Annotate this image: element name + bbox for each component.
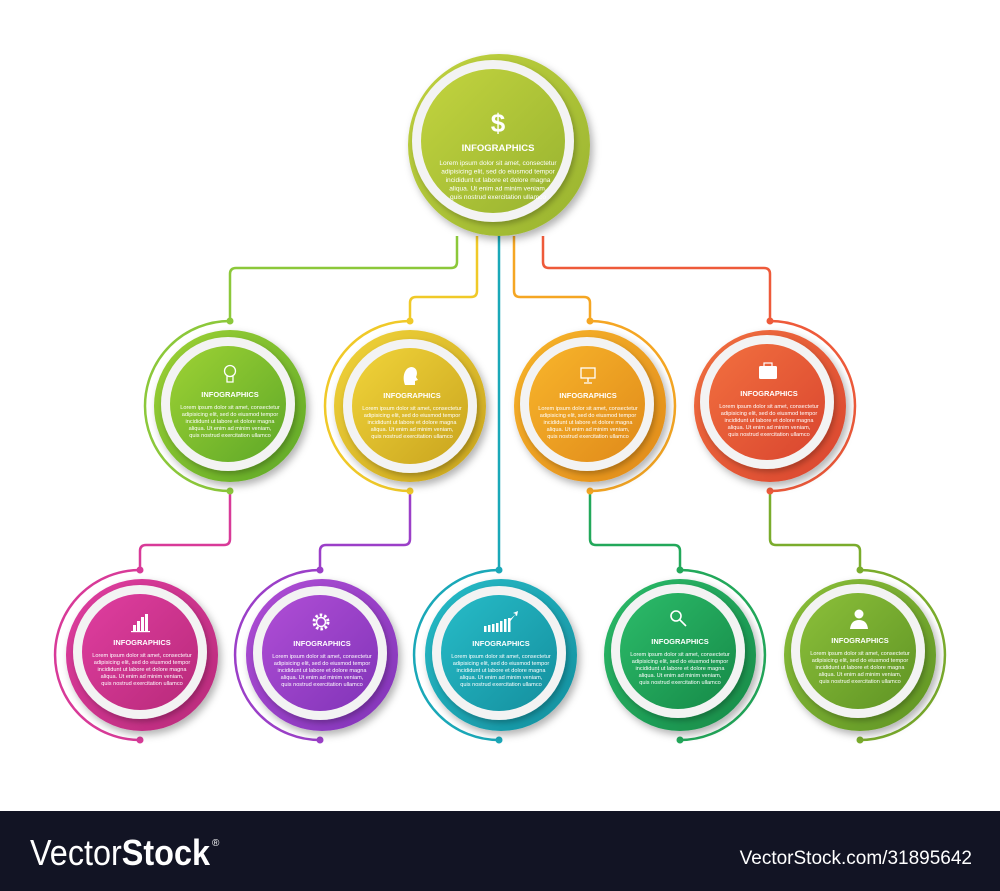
node: middle yellow: Lorem ipsum dolor sit amet, consectetur <box>362 406 462 412</box>
node: middle orange <box>514 318 675 494</box>
node: bottom teal: INFOGRAPHICS <box>472 639 530 648</box>
node: bottom pink: incididunt ut labore et dolore magna <box>98 667 187 673</box>
node: top <box>408 54 590 236</box>
node: bottom green: aliqua. Ut enim ad minim veniam, <box>639 673 722 679</box>
node: bottom olive: quis nostrud exercitation ullamco <box>819 679 901 685</box>
node: bottom green: quis nostrud exercitation ullamco <box>639 680 721 686</box>
node: bottom pink <box>55 566 218 744</box>
node: bottom purple <box>235 566 398 744</box>
node: middle yellow: aliqua. Ut enim ad minim veniam, <box>371 427 454 433</box>
node: middle red: incididunt ut labore et dolore magna <box>725 418 814 424</box>
node: middle green: incididunt ut labore et dolore magna <box>186 419 275 425</box>
node: middle orange: adipisicing elit, sed do eiusmod tempor <box>540 413 636 419</box>
node: middle red: INFOGRAPHICS <box>740 389 798 398</box>
node: bottom pink: INFOGRAPHICS <box>113 638 171 647</box>
node: middle red: aliqua. Ut enim ad minim veniam, <box>728 425 811 431</box>
node: middle orange: quis nostrud exercitation ullamco <box>547 434 629 440</box>
footer banner: ® <box>212 838 220 849</box>
icon: briefcase <box>759 363 777 379</box>
connectors: middle to bottom row <box>140 491 860 570</box>
node: middle red: adipisicing elit, sed do eiusmod tempor <box>721 411 817 417</box>
icon: gear <box>314 615 328 629</box>
node: middle green <box>145 318 306 494</box>
node: middle yellow: quis nostrud exercitation ullamco <box>371 434 453 440</box>
body text: adipisicing elit, sed do eiusmod tempor <box>441 168 556 176</box>
node: bottom purple: Lorem ipsum dolor sit amet, consectetur <box>272 654 372 660</box>
node: bottom olive: Lorem ipsum dolor sit amet, consectetur <box>810 651 910 657</box>
node: bottom olive: incididunt ut labore et dolore magna <box>816 665 905 671</box>
footer banner <box>0 811 1000 891</box>
node: bottom teal <box>414 566 577 744</box>
node: middle green: aliqua. Ut enim ad minim veniam, <box>189 426 272 432</box>
node: middle orange: aliqua. Ut enim ad minim veniam, <box>547 427 630 433</box>
node: bottom pink: quis nostrud exercitation ullamco <box>101 681 183 687</box>
body text: incididunt ut labore et dolore magna <box>446 177 551 184</box>
node: middle green: INFOGRAPHICS <box>201 390 259 399</box>
node: middle red: Lorem ipsum dolor sit amet, consectetur <box>719 404 819 410</box>
logo: VectorStock <box>30 832 211 873</box>
icon: dollar: $ <box>491 108 506 138</box>
node: bottom teal: quis nostrud exercitation ullamco <box>460 682 542 688</box>
node: bottom teal: adipisicing elit, sed do eiusmod tempor <box>453 661 549 667</box>
node: bottom green: Lorem ipsum dolor sit amet, consectetur <box>630 652 730 658</box>
node: bottom green: adipisicing elit, sed do eiusmod tempor <box>632 659 728 665</box>
node: bottom green: incididunt ut labore et dolore magna <box>636 666 725 672</box>
title: INFOGRAPHICS <box>462 143 534 154</box>
node: bottom purple: adipisicing elit, sed do eiusmod tempor <box>274 661 370 667</box>
node: middle orange: INFOGRAPHICS <box>559 391 617 400</box>
icon: bulb <box>224 366 236 382</box>
node: bottom olive: aliqua. Ut enim ad minim veniam, <box>819 672 902 678</box>
node: bottom purple: aliqua. Ut enim ad minim veniam, <box>281 675 364 681</box>
connectors: top to middle row <box>230 236 770 570</box>
node: bottom teal: aliqua. Ut enim ad minim veniam, <box>460 675 543 681</box>
node: middle green: adipisicing elit, sed do eiusmod tempor <box>182 412 278 418</box>
icon: magnifier <box>671 611 686 626</box>
body text: Lorem ipsum dolor sit amet, consectetur <box>439 160 557 167</box>
icon: growth chart <box>484 611 518 632</box>
icon: bar chart <box>131 614 150 632</box>
node: bottom teal: Lorem ipsum dolor sit amet, consectetur <box>451 654 551 660</box>
node: middle green: quis nostrud exercitation ullamco <box>189 433 271 439</box>
body text: aliqua. Ut enim ad minim veniam, <box>449 186 547 192</box>
node: middle yellow: adipisicing elit, sed do eiusmod tempor <box>364 413 460 419</box>
node: bottom green <box>604 566 765 744</box>
body text: quis nostrud exercitation ullamco <box>450 194 546 201</box>
node: bottom olive <box>784 566 945 744</box>
icon: monitor <box>581 368 595 383</box>
node: bottom pink: Lorem ipsum dolor sit amet, consectetur <box>92 653 192 659</box>
node: middle yellow: INFOGRAPHICS <box>383 391 441 400</box>
node: bottom teal: incididunt ut labore et dolore magna <box>457 668 546 674</box>
body text <box>439 160 557 201</box>
icon: head <box>404 367 418 385</box>
node: bottom olive: INFOGRAPHICS <box>831 636 889 645</box>
node: bottom purple: incididunt ut labore et dolore magna <box>278 668 367 674</box>
url: VectorStock.com/31895642 <box>740 848 972 869</box>
icon: person <box>850 610 868 629</box>
node: middle green: Lorem ipsum dolor sit amet, consectetur <box>180 405 280 411</box>
node: middle red: quis nostrud exercitation ullamco <box>728 432 810 438</box>
node: middle yellow <box>325 318 486 494</box>
node: bottom pink: aliqua. Ut enim ad minim veniam, <box>101 674 184 680</box>
node: middle orange: Lorem ipsum dolor sit amet, consectetur <box>538 406 638 412</box>
node: bottom pink: adipisicing elit, sed do eiusmod tempor <box>94 660 190 666</box>
node: bottom purple: quis nostrud exercitation ullamco <box>281 682 363 688</box>
node: bottom olive: adipisicing elit, sed do eiusmod tempor <box>812 658 908 664</box>
node: middle orange: incididunt ut labore et dolore magna <box>544 420 633 426</box>
node: middle red <box>694 318 855 494</box>
node: middle yellow: incididunt ut labore et dolore magna <box>368 420 457 426</box>
node: bottom green: INFOGRAPHICS <box>651 637 709 646</box>
node: bottom purple: INFOGRAPHICS <box>293 639 351 648</box>
